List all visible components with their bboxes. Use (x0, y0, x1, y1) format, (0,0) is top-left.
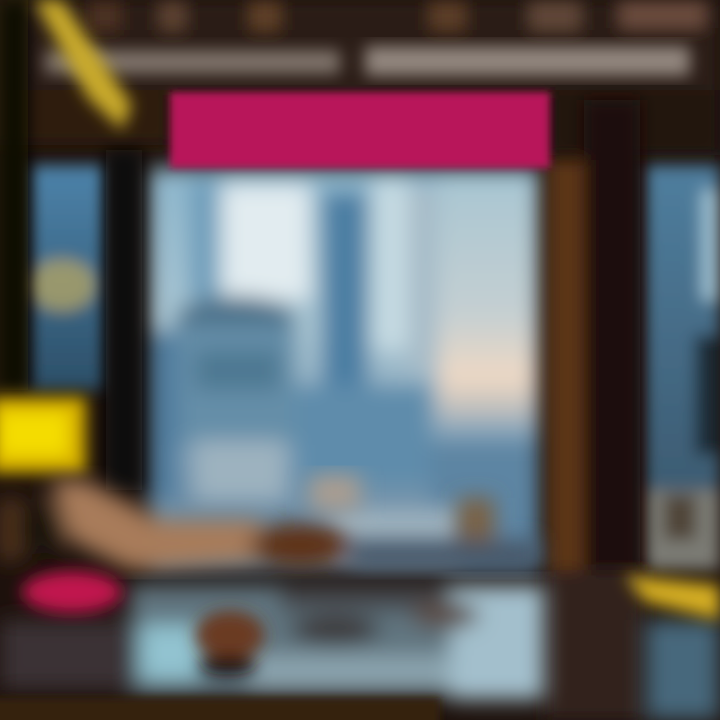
center window: sky and skyline (148, 168, 540, 568)
tall towers (190, 178, 218, 298)
left window (28, 165, 106, 390)
yellow lamp (0, 397, 86, 473)
glass table and reflections (0, 585, 720, 720)
right window (645, 165, 720, 570)
pink cushion (22, 571, 122, 613)
sofa and foreground (0, 475, 540, 570)
domed building (175, 296, 295, 340)
ceiling: dark wood beams (0, 0, 720, 155)
title smudge (45, 46, 690, 76)
yellow diagonal (34, 0, 132, 130)
yellow stripe at right (625, 575, 720, 620)
pink banner (170, 92, 550, 168)
sky highlights (222, 185, 310, 300)
floor foreground (0, 698, 440, 720)
coffee table bowl (196, 611, 264, 674)
midground towers (296, 385, 431, 485)
